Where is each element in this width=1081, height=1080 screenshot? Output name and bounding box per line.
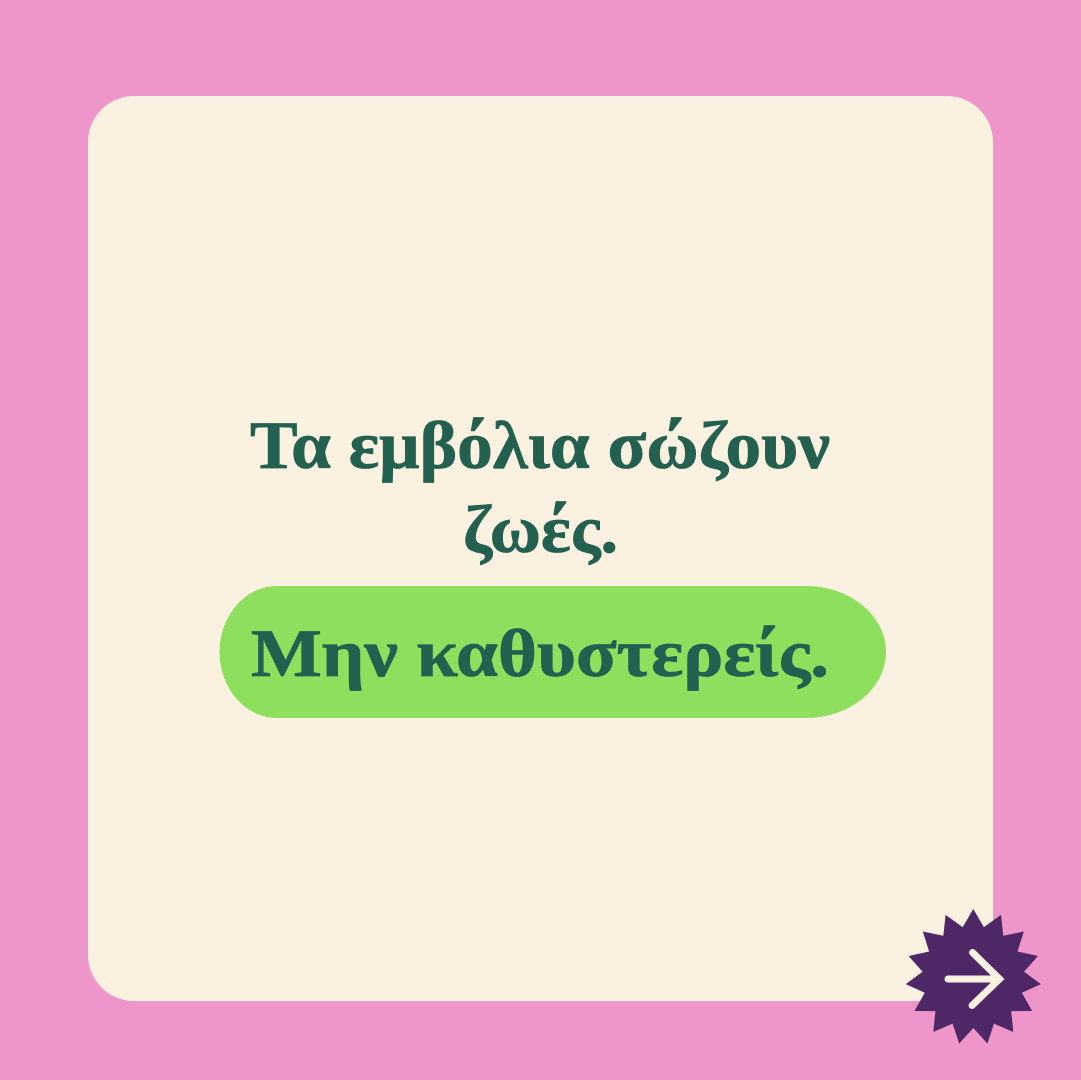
icon: next arrow badge (906, 909, 1041, 1044)
cream card panel (88, 96, 993, 1001)
heading: vaccines save lives (250, 407, 830, 567)
green pill callout: Μην καθυστερείς. (251, 615, 829, 691)
heading: vaccines save lives: Τα εμβόλια σώζουν (250, 407, 830, 483)
heading: vaccines save lives: ζωές. (463, 491, 618, 567)
green pill callout (219, 586, 886, 718)
